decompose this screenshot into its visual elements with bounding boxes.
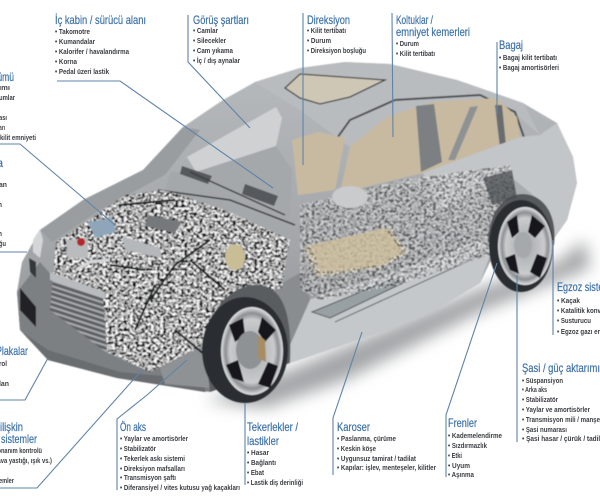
heading (396, 13, 470, 39)
heading: sistemler (1, 432, 37, 446)
items: • Diferansiyel / vites kutusu yağ kaçakları (120, 483, 240, 492)
heading: Koltuklar / (396, 13, 433, 27)
items: • Cam yıkama (193, 46, 234, 55)
items: • Camlar (193, 26, 218, 35)
callout: Tekerlekler / lastikler (245, 403, 303, 487)
items: • Süspansiyon (522, 376, 563, 385)
rear spoke gaps (505, 215, 547, 278)
ground shadow (205, 240, 590, 408)
heading: Direksiyon (307, 13, 350, 27)
items: • Şasi numarası (522, 425, 567, 434)
items (499, 53, 559, 72)
items: • Pedal üzeri lastik (55, 67, 110, 76)
items: • Takomotre (55, 27, 90, 36)
items (522, 376, 600, 443)
items: • Lastik diş derinliği (247, 478, 303, 487)
leader line (0, 370, 142, 488)
items: • Durum (307, 36, 331, 45)
red cap (77, 238, 85, 246)
valve cover (145, 215, 182, 233)
front bumper (17, 262, 210, 392)
leader line (333, 332, 362, 475)
front rim (221, 307, 283, 395)
callout: Koltuklar / emniyet kemerleri (392, 13, 470, 137)
heading: İç kabin / sürücü alanı (55, 13, 146, 27)
items: • Kapılar: işlev, menteşeler, kilitler (337, 463, 436, 472)
items (0, 83, 36, 142)
C pillar (495, 105, 506, 148)
items: • Silecekler (193, 36, 226, 45)
items (557, 296, 600, 336)
items (193, 26, 240, 65)
rear rim (498, 207, 552, 285)
items (337, 434, 436, 472)
cabin chassis lattice (300, 165, 514, 300)
rear tire (489, 200, 553, 292)
items: • Durum (396, 39, 419, 48)
brake caliper (258, 335, 266, 362)
items: • Kaçak (557, 296, 581, 305)
leader line (392, 13, 393, 137)
cabin seat lower (303, 227, 407, 277)
hood edge highlight (40, 127, 200, 242)
items: • Direksiyon mafsalları (120, 464, 185, 473)
leader line (446, 263, 497, 477)
headlight lower (29, 258, 36, 278)
callout: Frenler (446, 263, 502, 479)
coolant reservoir (88, 218, 116, 238)
items: • Susturucu (557, 316, 591, 325)
B pillar (416, 104, 442, 172)
items: • İç / dış aynalar (193, 56, 240, 65)
leader line (57, 81, 273, 188)
leader line (302, 13, 304, 165)
heading (0, 420, 37, 446)
seat overlay (310, 228, 402, 272)
items (55, 27, 130, 76)
items (0, 180, 7, 248)
heading: ilişkin (0, 420, 23, 434)
front tire (202, 297, 288, 403)
battery (66, 238, 88, 258)
items: kilit emniyeti (0, 133, 36, 142)
callout: İç kabin / sürücü alanı (55, 13, 273, 188)
callout: Ön aks (117, 360, 240, 492)
callout: Egzoz sistemi (553, 240, 600, 336)
items: • Bagaj kilit tertibatı (499, 53, 557, 62)
callout: Şasi / güç aktarımı (517, 275, 600, 443)
heading: Bagaj (499, 38, 523, 52)
side sill (288, 240, 492, 363)
items: • Paslanma, çürüme (337, 434, 396, 443)
callout: Görüş şartları (188, 13, 250, 128)
items: • Aşınma (448, 470, 475, 479)
items (0, 446, 52, 485)
sill trim (335, 252, 488, 322)
items (307, 26, 366, 55)
front wheel arch (205, 285, 290, 392)
radiator (50, 277, 107, 353)
items (396, 39, 435, 58)
items: • Transmisyon şaftı (120, 473, 176, 482)
items: • Uygunsuz tamirat / tadilat (337, 454, 416, 463)
rear quarter panel (423, 123, 577, 240)
callout: Karoser (333, 332, 436, 475)
items: • Sızdırmazlık (448, 441, 488, 450)
items: • Etki (448, 451, 462, 460)
leader line (496, 42, 498, 115)
car body silhouette (17, 62, 577, 392)
heading: Frenler (448, 416, 477, 430)
leader line (552, 240, 554, 335)
air duct (76, 260, 110, 270)
leader line (516, 275, 518, 442)
items: • Keskin köşe (337, 444, 376, 453)
headlight (33, 229, 43, 258)
pulley (225, 244, 245, 270)
rear suspension (483, 170, 517, 205)
heading: Tekerlekler / (247, 420, 299, 434)
items: • Kilit tertibatı (307, 26, 346, 35)
items: • Kilit tertibatı (396, 49, 435, 58)
sill rail (312, 279, 405, 318)
items: • Kumandalar (55, 37, 95, 46)
items (448, 431, 502, 479)
items: • Bagaj amortisörleri (499, 63, 559, 72)
items: • Ebat (247, 468, 264, 477)
rear cabin beige (340, 98, 520, 193)
windshield glass (187, 107, 282, 172)
items: • Direksiyon boşluğu (307, 46, 366, 55)
brake disc (236, 331, 264, 369)
heading: Karoser (337, 420, 370, 434)
front door panel (270, 270, 310, 368)
callout: Direksiyon (303, 13, 366, 165)
dash dark strap (158, 172, 295, 225)
items (247, 448, 303, 487)
engine bay (53, 190, 290, 372)
dashboard (165, 146, 292, 240)
heading: emniyet kemerleri (396, 25, 470, 39)
items: • Tekerlek askı sistemi (120, 454, 185, 463)
rear wheel arch (488, 194, 555, 255)
leader line (0, 144, 115, 225)
items (0, 359, 9, 388)
leader line (0, 358, 48, 400)
leader line (0, 251, 27, 253)
callout: motor (cut at left edge) (0, 156, 27, 252)
door mirror (332, 186, 368, 208)
heading: Ön aks (120, 420, 146, 434)
leader line (117, 360, 187, 490)
items: • Bağlantı (247, 458, 276, 467)
heading (247, 420, 299, 448)
items (120, 434, 240, 492)
items: • Uyum (448, 461, 470, 470)
intake manifold (123, 237, 162, 258)
items: • Hasar (247, 448, 269, 457)
callout: ilişkin sistemler (cut at left edge) (0, 370, 142, 488)
bumper lower lip (22, 332, 205, 392)
dash vents (180, 166, 278, 206)
leader line (188, 15, 250, 128)
front seat back beige (292, 132, 345, 195)
sunroof (285, 74, 385, 104)
items: • Stabilizatör (120, 444, 156, 453)
items: • Stabilizatör (522, 395, 558, 404)
items: • Kalorifer / havalandırma (55, 47, 130, 56)
spoke gaps (226, 317, 278, 388)
roof (255, 62, 540, 147)
items: • Yaylar ve amortisörler (120, 434, 188, 443)
car cutaway illustration (17, 62, 577, 403)
items: • Korna (55, 57, 78, 66)
rear hub (514, 232, 532, 258)
grille slots (20, 288, 36, 327)
callout: Plakalar (cut at left edge) (0, 344, 48, 400)
callout: bölümü (cut at left edge) (0, 70, 115, 225)
bumper light panel (160, 345, 210, 388)
callout: Bagaj (497, 38, 559, 115)
items: • Arka aks (522, 385, 547, 394)
rear belt strap (448, 106, 478, 160)
leader line (244, 403, 246, 485)
engine hoses (110, 200, 225, 355)
A pillar (300, 95, 525, 190)
heading: Görüş şartları (193, 13, 249, 27)
heading: lastikler (247, 434, 279, 448)
items: • Kademelendirme (448, 431, 502, 440)
radiator support bar (50, 272, 105, 299)
